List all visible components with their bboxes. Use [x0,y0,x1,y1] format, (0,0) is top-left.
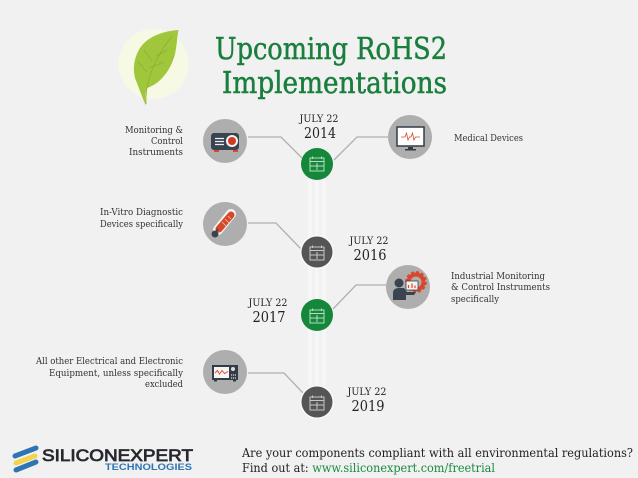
label: All other equipment: Equipment, unless specifically [49,369,184,379]
label: Monitoring and Control Instruments: Control [151,137,183,147]
label: Industrial Monitoring: & Control Instruments [451,283,550,293]
date: July 22 2017: 2017 [252,308,286,326]
date: July 22 2014: 2014 [304,124,336,142]
date: July 22 2019: JULY 22 [347,387,386,398]
node: 2019 [300,385,334,419]
title: Upcoming RoHS2 [215,32,447,66]
date: July 22 2019 [347,387,386,415]
label: In-Vitro Diagnostic: Devices specifically [100,220,184,230]
connector lines [248,137,388,393]
title [215,32,447,100]
logo: SiliconExpert Technologies [15,446,193,473]
label: All other equipment: excluded [145,380,183,390]
icon: monitor [388,115,432,159]
logo: SiliconExpert Technologies: SILICONEXPERT [42,446,193,465]
date: July 22 2017 [248,298,288,326]
date: July 22 2016: JULY 22 [349,236,388,247]
label: Monitoring and Control Instruments [125,126,183,158]
timeline track [308,180,326,385]
date: July 22 2014 [299,114,338,142]
logo: SiliconExpert Technologies: TECHNOLOGIES [105,462,192,473]
date: July 22 2014: JULY 22 [299,114,338,125]
node: 2017 [301,299,333,331]
call to action [241,445,633,475]
label: All other equipment [35,357,184,390]
icon: leaf logo [118,29,188,106]
node: 2014 [301,148,333,180]
date: July 22 2019: 2019 [352,397,384,415]
date: July 22 2016 [349,236,388,264]
label: Medical Devices: Medical Devices [454,134,523,144]
icon: projector [203,119,247,163]
label: Industrial Monitoring [451,272,550,305]
label: In-Vitro Diagnostic [100,208,184,230]
icon: engineer with gear [386,265,430,309]
icon: thermometer [203,202,247,246]
call to action: Find out at: www.siliconexpert.com/freetrial [242,460,495,475]
label: Monitoring and Control Instruments: Monitoring & [125,126,183,136]
label: Industrial Monitoring: specifically [451,295,500,305]
date: July 22 2017: JULY 22 [248,298,288,309]
label: Monitoring and Control Instruments: Instruments [129,148,183,158]
title: Implementations [222,66,447,100]
node: 2016 [300,235,334,269]
label: In-Vitro Diagnostic: In-Vitro Diagnostic [100,208,183,218]
date: July 22 2016: 2016 [354,246,386,264]
icon: oscilloscope [203,350,247,394]
label: All other equipment: All other Electrical and Electronic [35,357,183,367]
label: Industrial Monitoring: Industrial Monitoring [451,272,545,282]
